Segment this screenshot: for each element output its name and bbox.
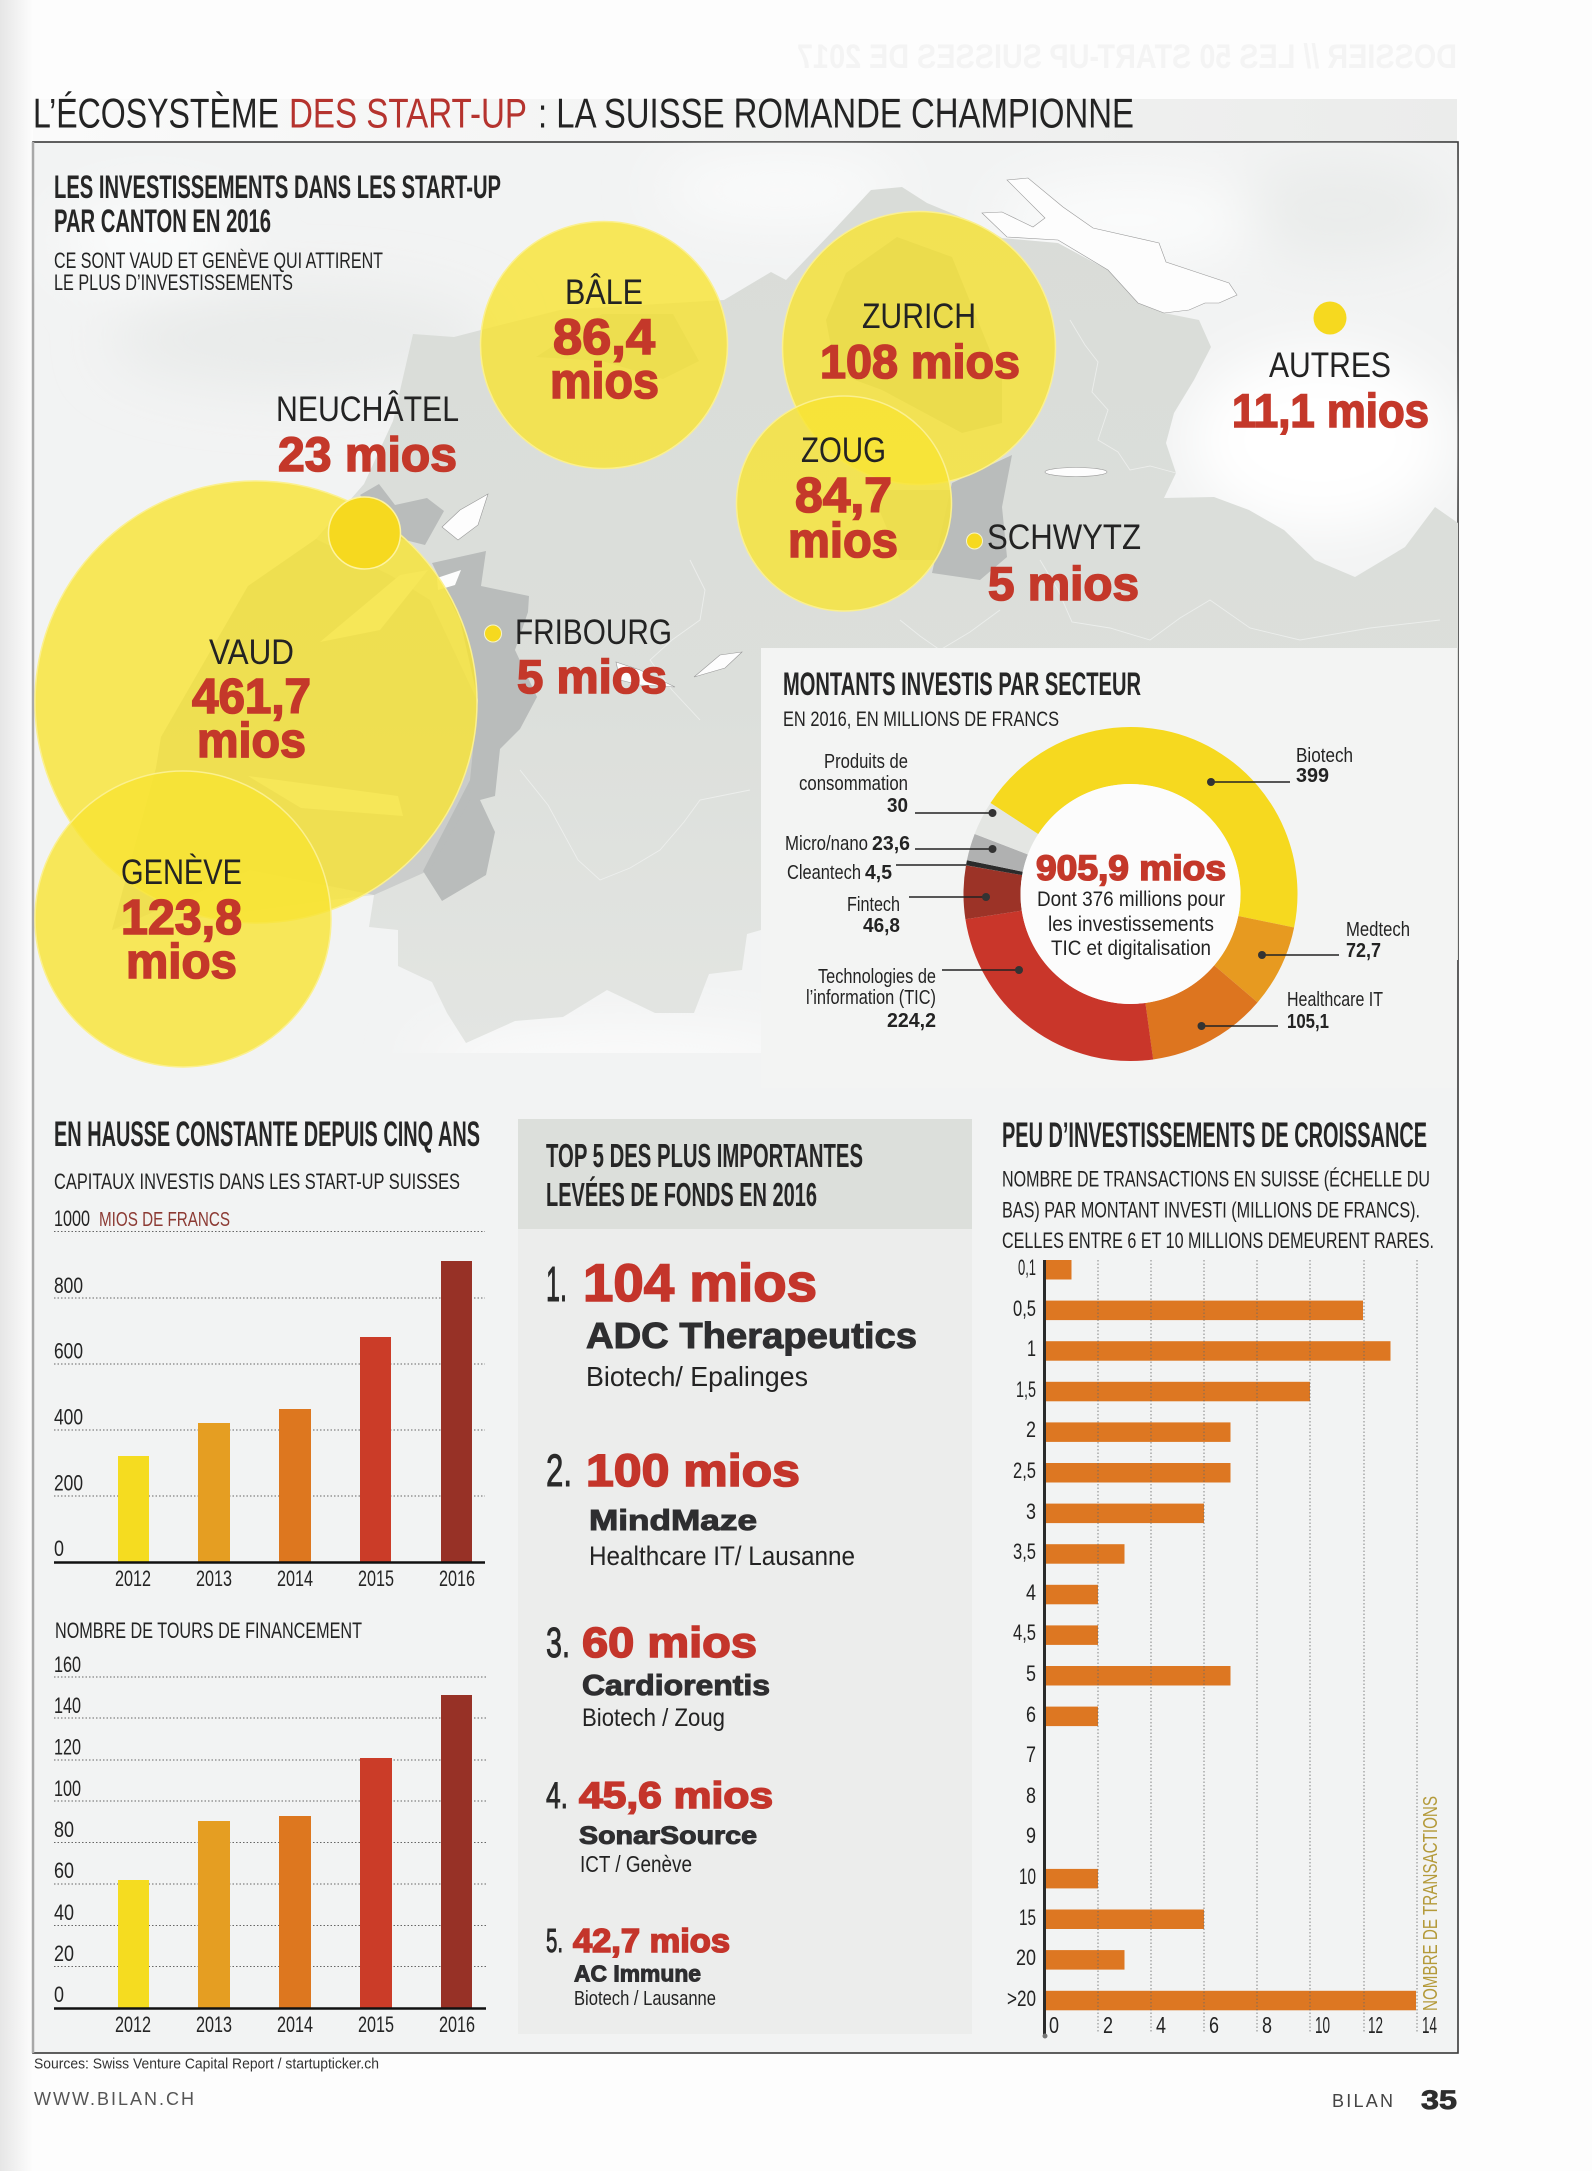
label: Neuchâtel: NEUCHÂTEL [276,390,459,429]
bar chart: transactions: 2 [1026,1417,1036,1442]
bar chart: capital invested: 2012 [115,1566,151,1591]
label: Zoug: 84,7 [795,469,892,523]
item 5: Biotech / Lausanne [574,1988,716,2010]
bar chart: capital invested: 0 [54,1536,64,1561]
item 4 [546,1775,773,1877]
panel: growth charts [54,1115,486,2037]
bar chart: capital invested: 2016 [439,1566,475,1591]
bar chart: transactions: 0,5 [1013,1296,1036,1321]
bar chart: funding rounds: 120 [54,1734,81,1760]
dot: Autres [1314,302,1346,334]
leader: Produits de consommation: 30 [887,795,908,817]
leader: Micro/nano: 23,6 [872,833,910,855]
dark cantons [112,237,1012,930]
label: Fribourg: FRIBOURG [515,613,672,652]
bar chart: transactions: 5 [1026,1661,1036,1686]
footer: magazine name: BILAN [1332,2091,1393,2111]
label: Genève: 123,8 [121,891,242,945]
item 4: SonarSource [579,1822,757,1850]
leader: Fintech: Fintech [847,894,900,916]
leader: Healthcare IT: Healthcare IT [1287,989,1383,1011]
label: Bâle: BÂLE [565,273,643,312]
item 3: 60 mios [582,1619,757,1667]
item 3 [546,1619,770,1732]
footer: website: WWW.BILAN.CH [34,2089,194,2109]
item 4: 45,6 mios [579,1775,773,1816]
bubble: Bâle [480,222,728,468]
bar chart: funding rounds: 140 [54,1693,81,1718]
panel: sectors [761,648,1457,1089]
heading: cantons: PAR CANTON EN 2016 [54,203,271,239]
dot: Fribourg [484,625,502,642]
footer: page number: 35 [1421,2085,1457,2115]
title: DES START-UP [289,90,527,136]
bar chart: capital invested: 400 [54,1404,83,1430]
label: Zurich [820,297,1020,388]
bar chart: transactions: 10 [1019,1864,1036,1889]
subheading: rounds: NOMBRE DE TOURS DE FINANCEMENT [55,1618,362,1643]
leader: Medtech: Medtech [1346,919,1410,941]
bar chart: transactions: 12 [1368,2012,1383,2038]
bubble: Genève [35,771,331,1067]
label: Genève: GENÈVE [121,853,242,892]
bar chart: funding rounds: 2013 [196,2012,232,2037]
heading: cantons: LES INVESTISSEMENTS DANS LES START-UP [54,169,501,205]
bar chart: funding rounds: 80 [54,1817,74,1842]
label: Schwytz: SCHWYTZ [987,518,1141,557]
label: Vaud: VAUD [209,633,294,672]
heading: sectors: EN 2016, EN MILLIONS DE FRANCS [783,708,1059,731]
bar chart: capital invested: 2013 [196,1566,232,1591]
leader: Fintech [847,893,990,937]
label: Vaud: 461,7 [192,670,311,724]
leader: Healthcare IT: 105,1 [1287,1011,1329,1033]
title [33,90,1134,136]
bar chart: transactions: 7 [1026,1742,1036,1767]
item 2: 100 mios [586,1445,800,1496]
leader: Biotech [1207,745,1353,787]
heading: cantons [54,169,501,295]
item 1: 104 mios [583,1254,817,1313]
leader: Fintech: 46,8 [863,915,900,937]
bar chart: transactions: 1,5 [1016,1377,1036,1402]
donut centre text: TIC et digitalisation [1051,937,1211,960]
donut chart [935,699,1326,1089]
leader: Cleantech: Cleantech [787,862,861,884]
bar chart: funding rounds: 40 [54,1900,74,1925]
heading: sectors [783,666,1141,731]
label: Autres: 11,1 mios [1232,384,1429,437]
bar chart: transactions: 3,5 [1013,1539,1036,1564]
bar chart: funding rounds: 2015 [358,2012,394,2037]
bar chart: transactions: 0,1 [1018,1255,1036,1280]
leader: Medtech: 72,7 [1346,940,1381,962]
heading: cantons: CE SONT VAUD ET GENÈVE QUI ATTIRENT [54,248,383,273]
bar chart: transactions: 20 [1016,1945,1036,1970]
item 5 [546,1922,730,2010]
bar chart: capital invested: 1000 [54,1206,90,1231]
heading: sectors: MONTANTS INVESTIS PAR SECTEUR [783,666,1141,702]
item 3: 3. [546,1619,570,1667]
leader: Micro/nano: Micro/nano [785,833,868,855]
label: Zurich: ZURICH [862,297,976,336]
leader: Medtech [1258,919,1410,962]
item 2 [546,1445,855,1571]
show-through mirrored header: DOSSIER // LES 50 START-UP SUISSES DE 2017 [797,38,1457,76]
item 4: ICT / Genève [580,1851,692,1877]
label: Bâle: mios [550,353,659,409]
bar chart: transactions: 4,5 [1013,1620,1036,1645]
leader: Cleantech: 4,5 [865,862,892,884]
item 4: 4. [546,1775,568,1816]
bar chart: transactions: 9 [1026,1823,1036,1848]
bubble: Vaud [35,481,477,923]
top 5 header [518,1119,972,1229]
leader: Micro/nano [785,833,996,855]
bar chart: transactions: 14 [1422,2012,1437,2038]
label: Fribourg [515,613,672,703]
title: L’ÉCOSYSTÈME [33,90,279,136]
label: Autres [1232,346,1429,437]
donut centre white [1020,784,1240,1004]
leader: TIC [806,966,1023,1032]
axis title: number of transactions: NOMBRE DE TRANSACTIONS [1420,1796,1442,2011]
bubble: Zoug [736,396,952,611]
main frame [33,142,1458,2053]
label: Bâle: 86,4 [553,309,655,365]
bar chart: transactions: 6 [1209,2012,1219,2038]
label: Genève [121,853,242,989]
label: Schwytz [987,518,1141,610]
heading: growth [54,1115,480,1194]
bubble: Zurich [782,212,1056,484]
item 1: Biotech/ Epalinges [586,1361,808,1392]
heading: transactions: BAS) PAR MONTANT INVESTI (MILLIONS DE FRANCS). [1002,1198,1420,1222]
bar chart: capital invested [54,1206,485,1591]
bar chart: funding rounds: 2016 [439,2012,475,2037]
item 1 [546,1254,917,1392]
label: Vaud: mios [197,714,306,768]
label: Bâle [550,273,659,409]
bar chart: transactions: 8 [1026,1783,1036,1808]
donut centre text: 905,9 mios [1036,849,1226,888]
sources: Sources: Swiss Venture Capital Report / startupticker.ch [34,2056,379,2072]
bar chart: funding rounds: 0 [54,1982,64,2007]
panel: map of Switzerland [160,142,1458,1043]
bar chart: transactions: 2,5 [1013,1458,1036,1483]
heading: growth: EN HAUSSE CONSTANTE DEPUIS CINQ ANS [54,1115,480,1154]
bar chart: funding rounds [54,1652,486,2037]
leader: TIC: l’information (TIC) [806,987,936,1009]
donut centre text: Dont 376 millions pour [1037,888,1225,911]
title strip [33,99,1457,142]
panel: top 5 [518,1119,972,2034]
leader: Cleantech [787,862,966,884]
bubble: Neuchâtel [328,497,400,569]
bar chart: transactions: 10 [1315,2012,1330,2038]
bar chart: capital invested: 2014 [277,1566,313,1591]
label: Zurich: 108 mios [820,335,1020,388]
leader: Produits de consommation [799,751,996,817]
bar chart: transactions: 2 [1103,2012,1113,2038]
item 2: Healthcare IT/ Lausanne [589,1541,855,1571]
bar chart: transactions [1007,1255,1437,2038]
dot: Schwytz [966,533,982,549]
bar chart: transactions: 3 [1026,1499,1036,1524]
bar chart: capital invested: 200 [54,1470,83,1496]
bar chart: transactions: 15 [1019,1905,1036,1930]
item 2: 2. [546,1445,572,1496]
bar chart: transactions: 0 [1049,2012,1059,2038]
label: Vaud [192,633,311,768]
panel: transactions [1002,1116,1442,2038]
label: Zoug: mios [788,514,898,568]
label: Autres: AUTRES [1269,346,1391,385]
heading: transactions [1002,1116,1434,1253]
label: Zoug: ZOUG [801,431,886,470]
top 5 header: LEVÉES DE FONDS EN 2016 [546,1176,817,1213]
leader: TIC: Technologies de [818,966,936,988]
bar chart: transactions: >20 [1007,1986,1036,2011]
title: : LA SUISSE ROMANDE CHAMPIONNE [538,90,1134,136]
bar chart: transactions: 1 [1027,1336,1036,1361]
leader: Produits de consommation: consommation [799,773,908,795]
bar chart: funding rounds: 2012 [115,2012,151,2037]
heading: growth: CAPITAUX INVESTIS DANS LES START-UP SUISSES [54,1169,460,1194]
land [352,187,1458,1043]
label: Fribourg: 5 mios [517,650,667,703]
bar chart: funding rounds: 60 [54,1858,74,1883]
label: Neuchâtel [276,390,459,482]
lighter lake bands in Vaud [248,570,428,816]
leader: Produits de consommation: Produits de [824,751,908,773]
top 5 header: TOP 5 DES PLUS IMPORTANTES [546,1137,863,1174]
bar chart: capital invested: 800 [54,1273,83,1298]
bar chart: funding rounds: 20 [54,1941,74,1966]
bar chart: funding rounds: 2014 [277,2012,313,2037]
heading: transactions: NOMBRE DE TRANSACTIONS EN SUISSE (ÉCHELLE DU [1002,1166,1430,1192]
leader: Healthcare IT [1198,989,1383,1033]
bar chart: funding rounds: 160 [54,1652,81,1677]
item 1: 1. [546,1258,567,1312]
panel: bubbles [35,212,1346,1067]
bar chart: capital invested: 2015 [358,1566,394,1591]
heading: transactions: CELLES ENTRE 6 ET 10 MILLIONS DEMEURENT RARES. [1002,1228,1434,1253]
item 5: 42,7 mios [573,1922,730,1959]
canton borders [520,320,1440,880]
bar chart: capital invested: 600 [54,1338,83,1364]
label: Schwytz: 5 mios [988,557,1139,610]
bar chart: transactions: 6 [1026,1702,1036,1727]
item 5: 5. [546,1922,563,1959]
item 2: MindMaze [589,1505,757,1537]
bar chart: capital invested: MIOS DE FRANCS [99,1209,230,1231]
bar chart: transactions: 4 [1026,1580,1036,1605]
donut centre text: les investissements [1048,913,1214,936]
item 3: Cardiorentis [582,1670,770,1702]
leader: TIC: 224,2 [887,1010,936,1032]
item 3: Biotech / Zoug [582,1704,725,1732]
leader: Biotech: Biotech [1296,745,1353,767]
label: Zoug [788,431,898,568]
heading: cantons: LE PLUS D’INVESTISSEMENTS [54,270,293,295]
bar chart: transactions: 4 [1156,2012,1166,2038]
lakes [437,178,1237,687]
cloud texture [228,142,1458,520]
bar chart: transactions: 8 [1262,2012,1272,2038]
donut centre text [1036,849,1226,960]
item 5: AC Immune [574,1960,701,1986]
leader: Biotech: 399 [1296,765,1329,787]
bar chart: funding rounds: 100 [54,1776,81,1801]
label: Neuchâtel: 23 mios [278,429,457,482]
item 1: ADC Therapeutics [586,1315,917,1356]
label: Genève: mios [126,935,237,989]
